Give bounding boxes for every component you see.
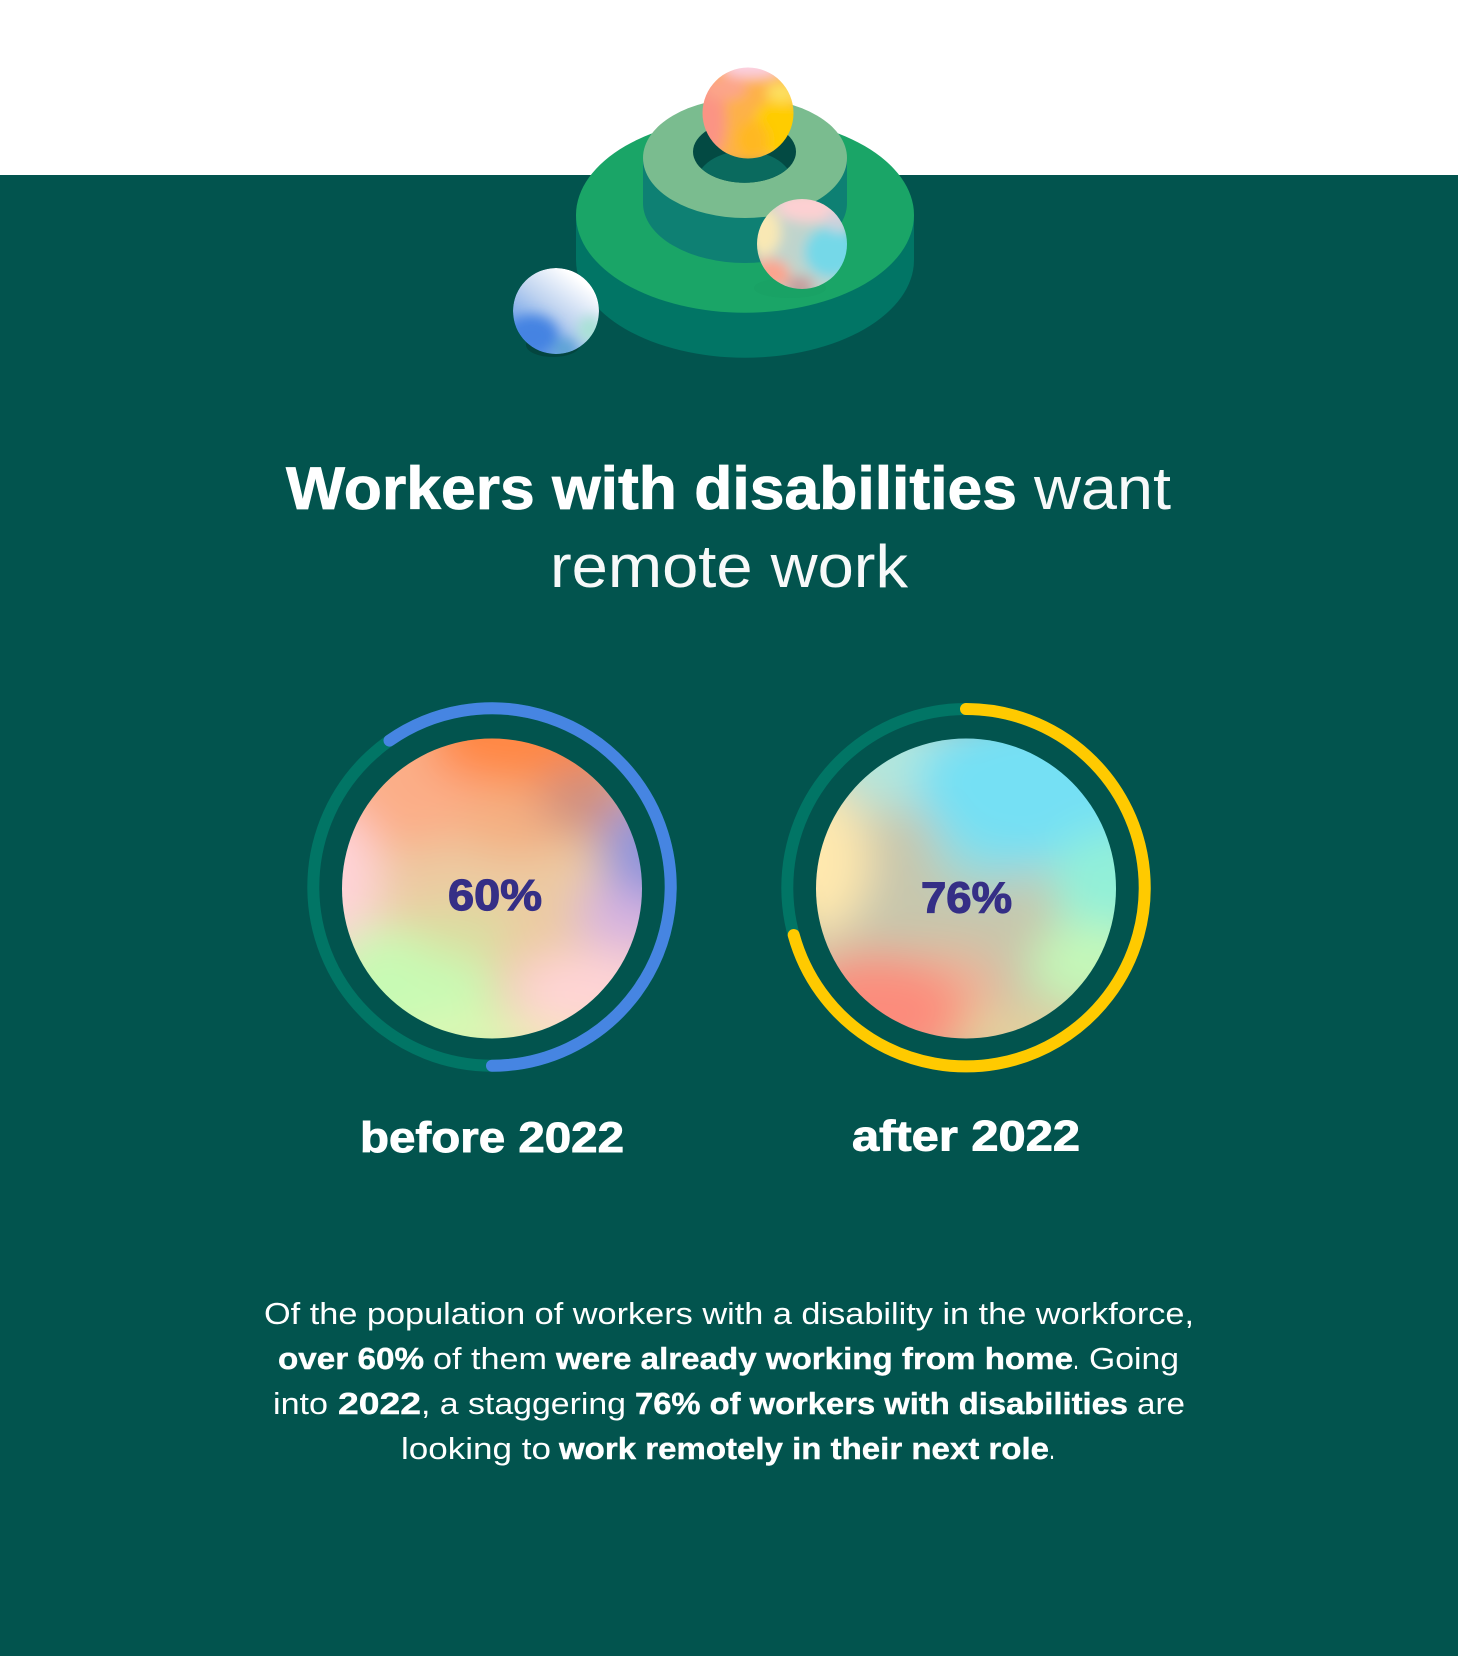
body paragraph: , a staggering: [421, 1386, 626, 1421]
body paragraph: over 60%: [278, 1341, 424, 1376]
body paragraph: .: [1049, 1431, 1055, 1466]
title: [286, 455, 1171, 600]
body paragraph: 2022: [338, 1386, 421, 1421]
body paragraph: work remotely in their next role: [558, 1431, 1049, 1466]
ring track: [313, 708, 671, 1066]
upper ring disc: [643, 98, 847, 263]
label: after 2022: [852, 1112, 1080, 1160]
body paragraph: .: [1073, 1341, 1079, 1376]
donut chart: before 2022, 60%: [307, 702, 677, 1153]
value: 76%: [921, 874, 1012, 922]
illustration: stacked discs and spheres: [506, 58, 914, 362]
progress arc: [390, 708, 671, 1066]
shadow under multicolor sphere: [754, 278, 826, 298]
progress arc: [794, 709, 1145, 1066]
body paragraph: into: [273, 1386, 328, 1421]
body paragraph: were already working from home: [555, 1341, 1073, 1376]
white header band: [0, 0, 1458, 175]
multicolor sphere: [757, 199, 847, 289]
body paragraph: are: [1137, 1386, 1185, 1421]
body paragraph: of them: [433, 1341, 547, 1376]
title: Workers with disabilities: [286, 455, 1017, 522]
ring hole: [693, 131, 796, 183]
orange sphere: [702, 68, 794, 158]
body paragraph: looking to: [401, 1431, 551, 1466]
body paragraph: Of the population of workers with a disability in the workforce,: [264, 1296, 1194, 1331]
body paragraph: Going: [1089, 1341, 1179, 1376]
lower disc: [576, 117, 914, 358]
title: remote work: [550, 533, 909, 600]
white-blue sphere: [513, 268, 599, 354]
label: before 2022: [360, 1114, 624, 1162]
body paragraph: 76% of workers with disabilities: [635, 1386, 1128, 1421]
value: 60%: [448, 871, 542, 920]
shadow under white-blue sphere: [526, 333, 580, 357]
gradient disc: [816, 738, 1116, 1038]
ring track: [787, 709, 1145, 1066]
body paragraph: [264, 1296, 1194, 1466]
gradient disc: [342, 738, 642, 1038]
donut chart: after 2022, 76%: [781, 703, 1151, 1152]
title: want: [1033, 455, 1171, 522]
